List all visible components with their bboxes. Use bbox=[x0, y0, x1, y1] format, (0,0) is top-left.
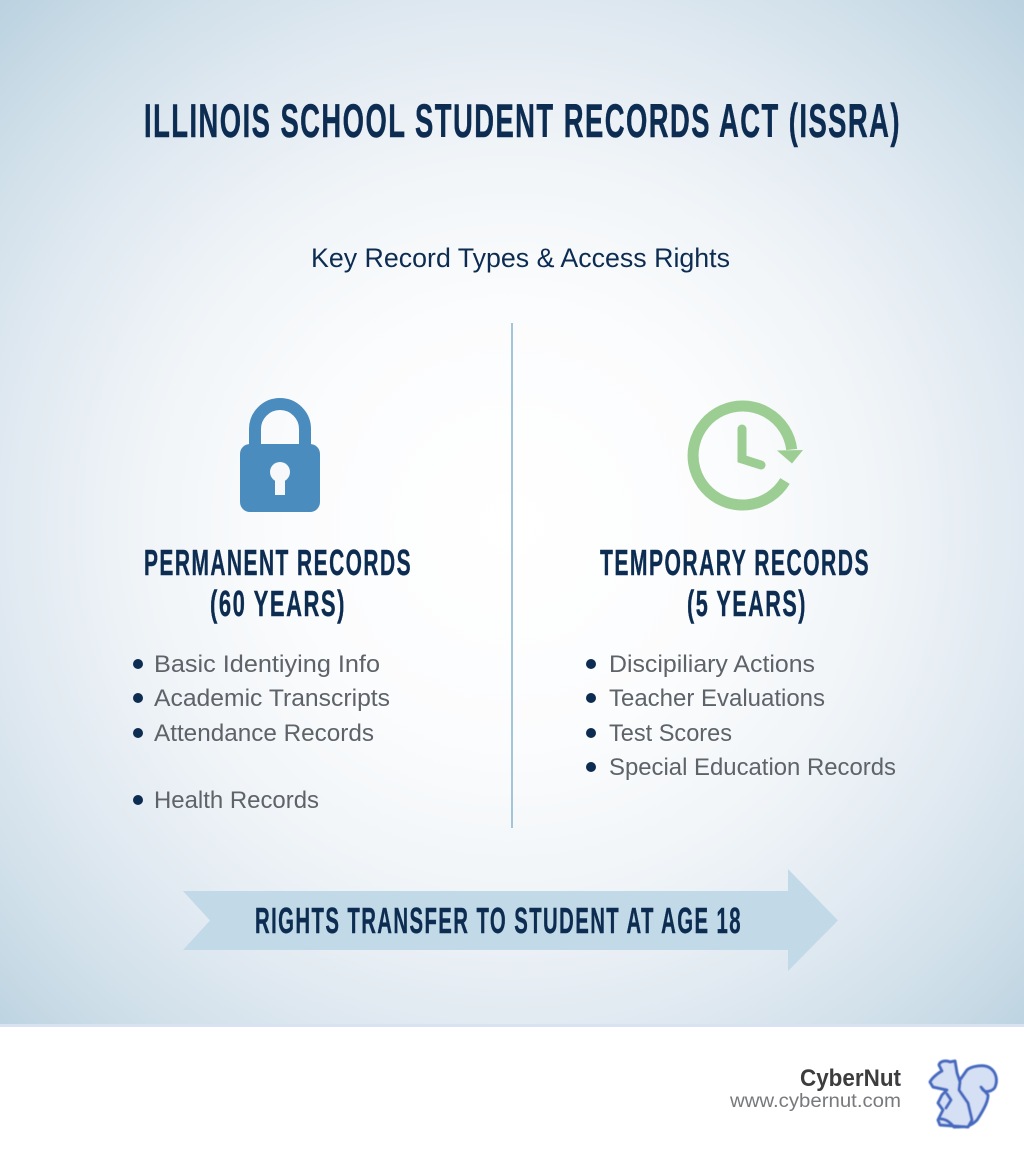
icon: padlock bbox=[240, 404, 320, 512]
panel: temporary records bbox=[586, 406, 896, 781]
list: permanent record items bbox=[133, 651, 390, 814]
list: temporary record items: Test Scores bbox=[609, 720, 732, 747]
icon: clock with circular arrow bbox=[693, 406, 803, 505]
heading: permanent records: (60 YEARS) bbox=[210, 583, 346, 624]
heading: permanent records: PERMANENT RECORDS bbox=[144, 542, 412, 583]
list: temporary record items: Discipiliary Actions bbox=[609, 651, 815, 678]
arrow: rights transfer banner bbox=[183, 869, 838, 971]
list: permanent record items: Health Records bbox=[154, 787, 319, 814]
icon: squirrel logo bbox=[930, 1061, 996, 1127]
panel: permanent records bbox=[133, 404, 412, 814]
list: temporary record items: Teacher Evaluations bbox=[609, 685, 825, 712]
subtitle: Key Record Types & Access Rights bbox=[311, 243, 730, 273]
list: permanent record items: Attendance Records bbox=[154, 720, 374, 747]
list: permanent record items: Academic Transcripts bbox=[154, 685, 390, 712]
center divider bbox=[511, 323, 513, 828]
footer panel bbox=[0, 1024, 1024, 1154]
list: temporary record items bbox=[586, 651, 896, 781]
list: permanent record items: Basic Identiying Info bbox=[154, 651, 380, 678]
list: temporary record items: Special Education Records bbox=[609, 754, 896, 781]
brand url: www.cybernut.com bbox=[729, 1091, 901, 1112]
heading: temporary records: (5 YEARS) bbox=[687, 583, 807, 624]
brand name: CyberNut bbox=[800, 1065, 901, 1092]
